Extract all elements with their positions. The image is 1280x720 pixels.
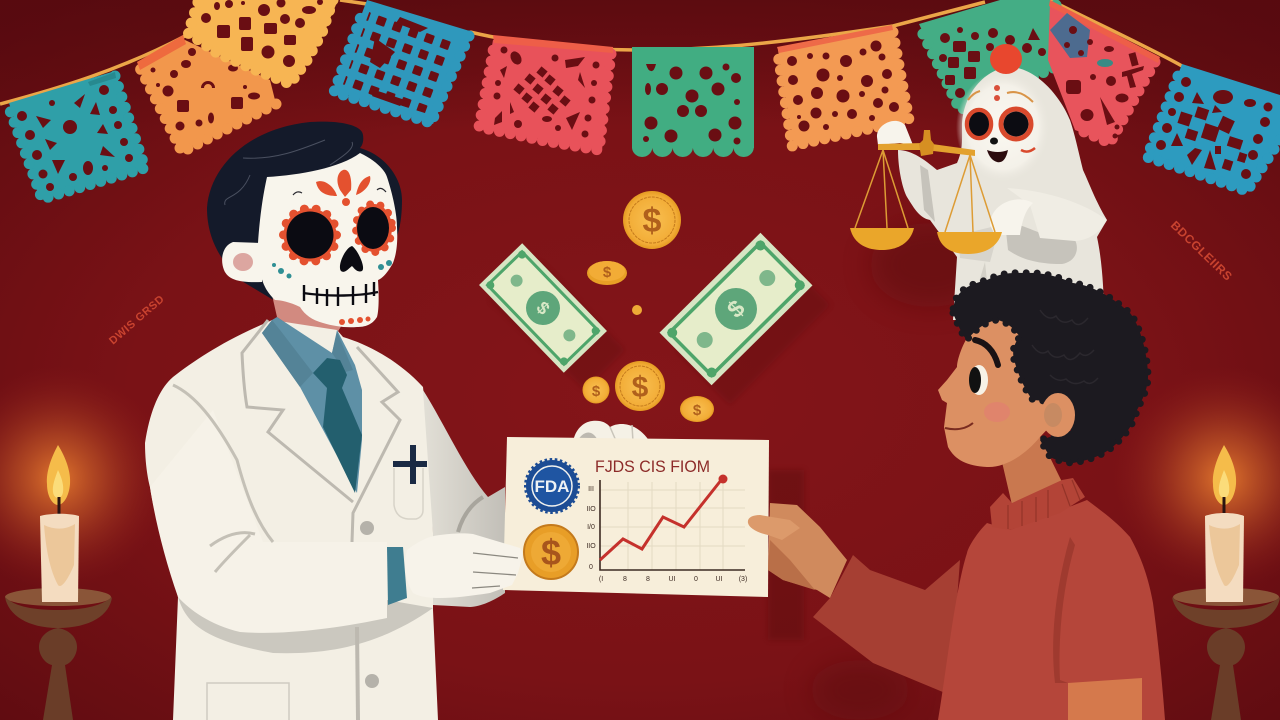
- line chart: (3): [739, 576, 747, 583]
- wall text right: BDCGLEIIRS: [1168, 218, 1235, 284]
- banner string: [0, 0, 1182, 104]
- document heading: FJDS CIS FIOM: [595, 458, 710, 476]
- candle right: [1172, 445, 1280, 720]
- shirt cuff: [387, 547, 407, 605]
- line chart: IIO: [586, 543, 596, 550]
- line chart: 0: [589, 564, 593, 571]
- boy hair: [953, 273, 1148, 463]
- flag yellow: [188, 0, 338, 84]
- flag green right: [919, 0, 1058, 110]
- line chart: UI: [668, 576, 676, 583]
- doctor inner ear: [233, 253, 253, 271]
- ghost eye left: [969, 112, 989, 136]
- wax drips: [1209, 524, 1240, 586]
- flag blue far right: [1147, 64, 1280, 191]
- candle body: [40, 514, 79, 602]
- line chart: IIO: [586, 506, 596, 513]
- line chart: 8: [623, 576, 627, 583]
- scale chains: [855, 150, 995, 232]
- paper sheet: [503, 437, 769, 597]
- cheek dots right: [378, 260, 392, 270]
- candle left: [5, 445, 112, 720]
- scale beam: [878, 143, 975, 156]
- boy ear: [1041, 393, 1075, 437]
- ghost eye ring left: [967, 110, 991, 138]
- boy arm skin: [1068, 675, 1144, 720]
- scale pan right: [937, 232, 1002, 254]
- coin tilted upper: [587, 261, 627, 285]
- coin tilted upper: $: [603, 264, 612, 281]
- coin small right: $: [693, 402, 702, 419]
- boy collar: [990, 478, 1085, 530]
- candle dish back: [1173, 588, 1279, 606]
- line chart: (I: [599, 576, 603, 583]
- flag red: [478, 35, 613, 150]
- line chart: [586, 474, 747, 583]
- boy sleeve hem shadow: [1053, 537, 1075, 683]
- ghost folds: [920, 165, 1077, 312]
- coin large middle: [615, 361, 665, 411]
- boy torso: [938, 500, 1165, 720]
- doctor neck: [272, 295, 345, 355]
- line chart: 0: [694, 576, 698, 583]
- soft shadows behind figures: [490, 223, 990, 720]
- line chart: UI: [716, 576, 723, 583]
- wax drips: [44, 524, 75, 586]
- flame: [1213, 445, 1236, 505]
- skull face: [258, 153, 397, 327]
- skull nose: [340, 246, 363, 272]
- candle body: [1205, 513, 1244, 602]
- skull teeth: [303, 282, 378, 306]
- top wall shading: [0, 0, 1280, 130]
- ghost brows: [968, 91, 1033, 102]
- flag green with dots: [632, 47, 754, 157]
- doctor tie: [313, 358, 362, 493]
- doctor coat: [145, 320, 438, 720]
- ghost hand left: [877, 121, 913, 145]
- chin dots: [339, 316, 370, 325]
- line chart: I/0: [587, 524, 595, 531]
- candle dish back: [5, 588, 111, 606]
- forearm cuff line: [458, 497, 483, 532]
- flag blue: [333, 0, 473, 124]
- boy neck: [1002, 437, 1062, 505]
- boy eyebrow: [975, 340, 998, 365]
- collar ribs: [1008, 480, 1080, 529]
- boy sleeve arm: [813, 555, 960, 695]
- ghost eye right: [1004, 112, 1028, 136]
- candle dish: [5, 597, 112, 628]
- candle glow right: [1112, 366, 1280, 590]
- coat fold lines: [173, 385, 273, 572]
- doctor glove front: [405, 533, 523, 598]
- coin small dot: [632, 305, 642, 315]
- flag teal: [9, 71, 145, 199]
- bill right: $: [722, 295, 751, 324]
- shirt collar shading: [262, 320, 353, 387]
- doctor figure: [145, 122, 505, 720]
- line chart: III: [588, 486, 594, 493]
- boy cheek: [984, 402, 1010, 422]
- boy pupil: [969, 367, 981, 393]
- bill right: [660, 233, 812, 385]
- eye left: [286, 212, 334, 258]
- flame: [47, 445, 70, 505]
- coat forearm in shadow: [423, 390, 505, 607]
- coin top: $: [643, 202, 662, 240]
- coin small left: $: [592, 383, 601, 400]
- doctor shirt: [262, 317, 362, 493]
- eye ring left: [284, 208, 336, 262]
- ghost eye ring right: [1001, 109, 1031, 139]
- boy figure: [813, 273, 1165, 720]
- placket line: [357, 627, 358, 720]
- document: [503, 437, 769, 597]
- scale pan left: [850, 228, 914, 250]
- scale pivot: [919, 130, 934, 156]
- dollar coin on paper: [524, 525, 578, 579]
- flame core: [53, 470, 63, 498]
- boy inner ear: [1044, 403, 1062, 427]
- ghost body: [898, 67, 1107, 320]
- candle stem: [1207, 628, 1245, 720]
- flag orange right: [777, 25, 909, 146]
- doctor sleeve: [150, 410, 387, 633]
- boy eye: [970, 365, 988, 395]
- candle glow left: [0, 366, 170, 590]
- coin top: [623, 191, 681, 249]
- papel picado flags: [9, 0, 1280, 199]
- ghost nose: [990, 138, 998, 144]
- ghost red topper: [990, 44, 1022, 74]
- doctor hair: [207, 122, 402, 301]
- doctor ear: [222, 242, 262, 282]
- wick: [1222, 497, 1226, 516]
- shadow under sleeve: [178, 597, 433, 653]
- eye right: [357, 207, 389, 249]
- flag orange: [137, 35, 276, 152]
- FDA seal: FDA: [535, 477, 569, 496]
- wick: [58, 497, 60, 518]
- flag pink right: [1048, 0, 1160, 143]
- coat lapels: [242, 320, 400, 542]
- boy smile: [945, 423, 973, 429]
- boy curls: [1032, 310, 1098, 384]
- ghost cheek mark: [1021, 148, 1035, 152]
- eye ring right: [356, 204, 392, 252]
- ghost hand right: [990, 199, 1033, 235]
- boy head: [938, 315, 1075, 467]
- black cross emblem: [393, 445, 427, 484]
- flame core: [1219, 470, 1229, 498]
- bill left: [479, 243, 607, 373]
- forehead ornament: [316, 170, 370, 206]
- ghost sleeve: [1007, 188, 1107, 241]
- eyebrow marks: [293, 188, 386, 195]
- lower coat pocket: [207, 683, 289, 720]
- bill left: $: [532, 297, 554, 319]
- FDA seal: [526, 460, 578, 512]
- boy hand: [748, 503, 847, 598]
- hair strokes: [225, 140, 353, 205]
- coin small left: [582, 376, 610, 404]
- candle stem: [39, 628, 77, 720]
- breast pocket: [394, 468, 423, 519]
- doctor back arm glove: [573, 421, 650, 450]
- cheek dots left: [272, 263, 292, 278]
- ghost figure: [877, 44, 1107, 320]
- balance scale: [850, 130, 1002, 254]
- ghost mouth: [987, 150, 1008, 162]
- wall text left: DWIS GRSD: [107, 293, 167, 347]
- coat buttons: [360, 521, 379, 688]
- coin small right: [680, 396, 714, 422]
- ghost forehead dots: [994, 85, 1000, 101]
- ghost face: [956, 71, 1050, 183]
- line chart: 8: [646, 576, 650, 583]
- candle dish: [1172, 597, 1280, 628]
- dollar coin on paper: $: [541, 532, 561, 573]
- coin large middle: $: [632, 371, 649, 404]
